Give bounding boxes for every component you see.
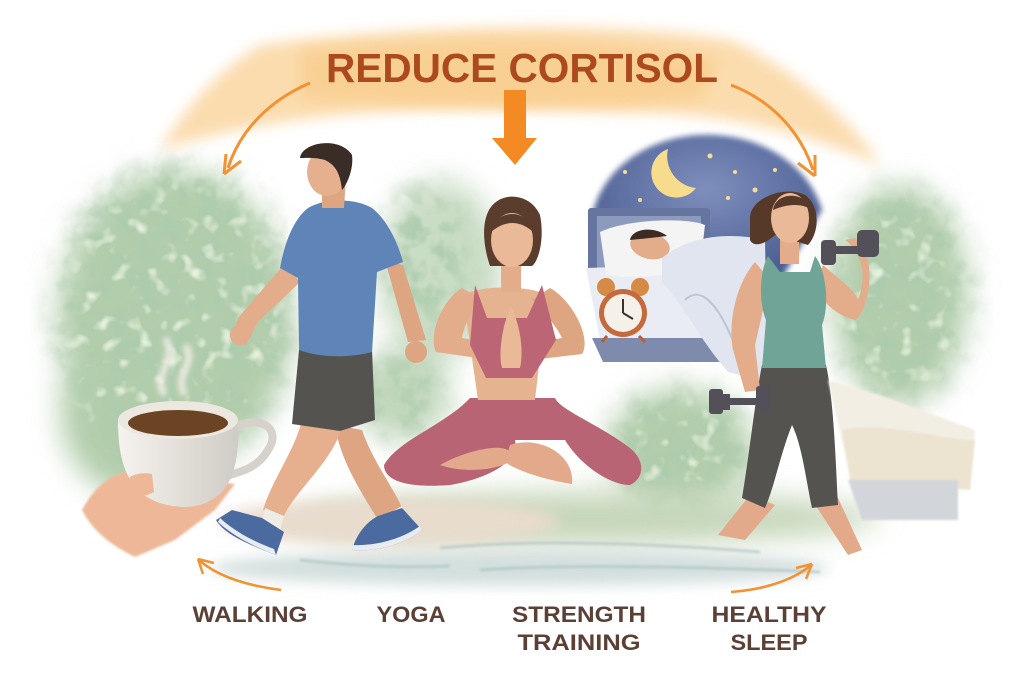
- panel: night sleep scene: [586, 135, 822, 382]
- arrow: bottom right: [731, 564, 812, 592]
- icon: moon: [651, 149, 696, 198]
- feet: [440, 448, 511, 470]
- arrow: bottom left: [198, 559, 281, 590]
- label: healthy sleep: [712, 602, 827, 655]
- figure: woman with dumbbells: [709, 192, 879, 555]
- shoes: [216, 510, 284, 555]
- right arm: [815, 238, 869, 320]
- label: walking: WALKING: [192, 602, 308, 627]
- cup body: [118, 420, 238, 507]
- label: yoga: YOGA: [376, 602, 446, 627]
- shirt: [280, 200, 403, 356]
- top: [470, 285, 556, 378]
- headboard: [588, 208, 710, 274]
- label: healthy sleep: SLEEP: [730, 630, 808, 655]
- figure: seated yoga woman: [384, 197, 641, 486]
- shorts: [292, 350, 375, 431]
- left arm: [232, 262, 300, 345]
- hands: [500, 306, 522, 368]
- lower legs: [718, 495, 775, 540]
- arrow: center down: [492, 90, 537, 165]
- hand: [82, 472, 235, 557]
- tank top: [761, 256, 826, 368]
- left arm: [731, 262, 770, 392]
- label: strength training: STRENGTH: [512, 602, 646, 627]
- torso: [463, 288, 547, 400]
- right arm: [385, 260, 426, 342]
- blanket: [662, 236, 768, 382]
- front leg: [263, 420, 342, 518]
- mattress: [586, 262, 770, 345]
- arrow: top left: [224, 83, 310, 174]
- leggings: [742, 365, 838, 508]
- background: spare bed: [828, 380, 975, 520]
- sleeping man: [628, 229, 672, 263]
- icon: coffee cup in hand: [82, 401, 273, 557]
- pillow: [600, 220, 705, 277]
- icon: steam: [161, 338, 189, 395]
- label: strength training: TRAINING: [518, 630, 640, 655]
- stars: [623, 154, 792, 202]
- label: healthy sleep: HEALTHY: [712, 602, 827, 627]
- title: REDUCE CORTISOL: [326, 45, 718, 91]
- thumb: [125, 473, 154, 496]
- neck and head: [780, 232, 799, 264]
- arrow: top right: [731, 85, 815, 176]
- label: strength training: [512, 602, 646, 655]
- icon: raised dumbbell: [821, 230, 879, 265]
- neck and head: [501, 260, 521, 292]
- legs: [384, 398, 641, 486]
- icon: alarm clock: [597, 278, 649, 342]
- socks: [262, 508, 284, 530]
- icon: low dumbbell: [709, 386, 770, 414]
- figure: walking man: [216, 143, 427, 555]
- back leg: [335, 425, 402, 520]
- title brush stroke: [160, 27, 880, 165]
- background: garden foliage: [57, 170, 968, 586]
- head: [322, 178, 346, 208]
- cup handle: [226, 422, 273, 476]
- arms: [434, 288, 505, 362]
